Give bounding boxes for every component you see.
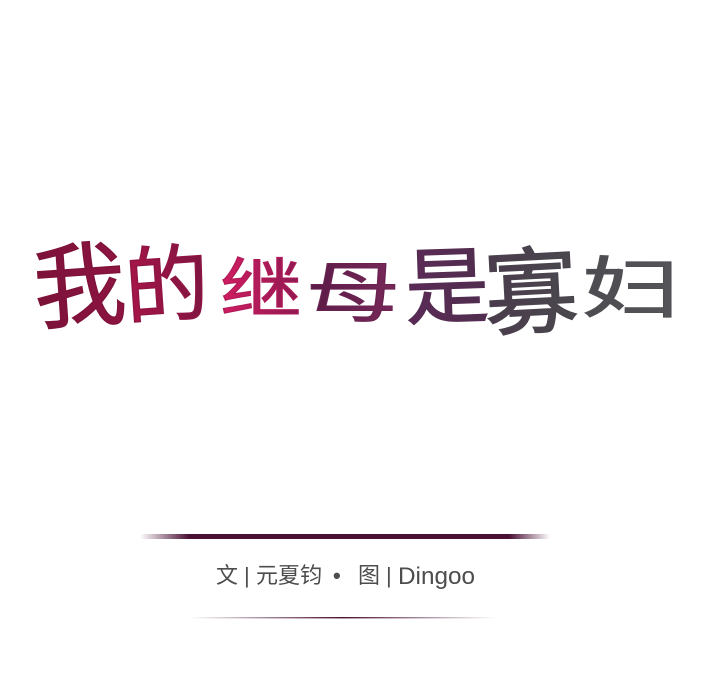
credits: 文 bbox=[216, 563, 238, 588]
title: 继 bbox=[220, 253, 302, 326]
credits: • bbox=[333, 563, 341, 588]
credits bbox=[216, 563, 475, 590]
credits: Dingoo bbox=[398, 563, 475, 590]
credits: 图 bbox=[358, 563, 380, 588]
title: 母 bbox=[306, 258, 400, 331]
title: 妇 bbox=[582, 252, 681, 326]
divider: top rule bbox=[140, 534, 550, 539]
credits: | bbox=[244, 563, 250, 588]
title bbox=[30, 234, 681, 348]
divider: bottom rule bbox=[190, 617, 495, 618]
title: 是 bbox=[403, 239, 491, 336]
title: 我 bbox=[30, 234, 129, 342]
credits: 元夏钧 bbox=[256, 563, 322, 588]
credits: | bbox=[386, 563, 392, 588]
title: 寡 bbox=[482, 238, 581, 348]
title: 的 bbox=[122, 236, 212, 336]
